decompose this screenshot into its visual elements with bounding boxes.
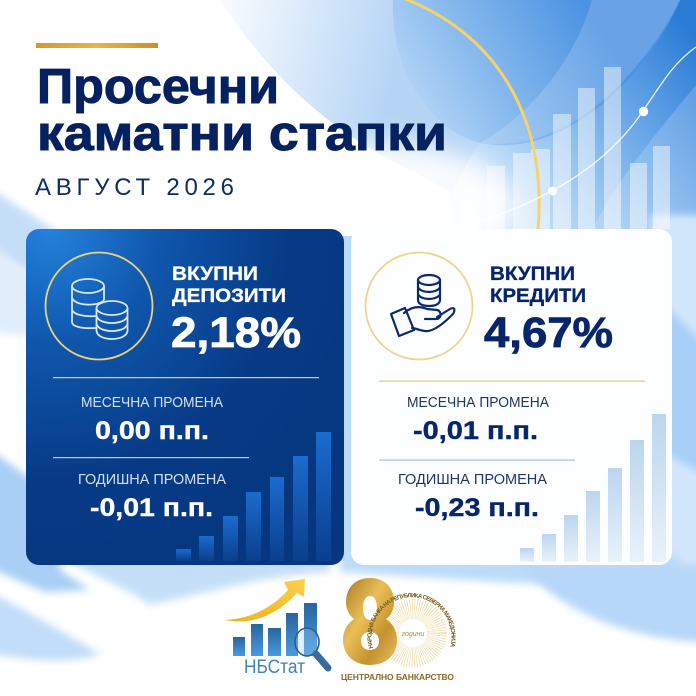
- title: [37, 60, 447, 161]
- logo: 80 years: ЦЕНТРАЛНО БАНКАРСТВО: [341, 672, 454, 682]
- label: total loans: КРЕДИТИ: [490, 286, 586, 307]
- label: annual change: ГОДИШНА ПРОМЕНА: [78, 472, 226, 488]
- title: Просечни: [37, 60, 279, 114]
- chart: deposits bars: [176, 432, 331, 561]
- label: total deposits: ДЕПОЗИТИ: [172, 286, 286, 307]
- label: monthly change: МЕСЕЧНА ПРОМЕНА: [81, 395, 223, 411]
- logo: 80 years: НАРОДНА БАНКА НА РЕПУБЛИКА СЕВЕРНА МАКЕДОНИЈА: [367, 593, 456, 649]
- label: total loans: ВКУПНИ: [490, 264, 575, 285]
- logo: NBStat: [225, 579, 328, 678]
- value: monthly change: 0,00 п.п.: [95, 417, 209, 445]
- value: annual change: -0,23 п.п.: [415, 494, 539, 522]
- logo: NBStat: НБСтат: [244, 657, 305, 678]
- trend line with dots: [465, 47, 696, 228]
- panel: loans: [351, 229, 672, 565]
- logo: 80 years: години: [402, 631, 424, 638]
- label: annual change: ГОДИШНА ПРОМЕНА: [398, 472, 547, 488]
- label: total deposits: [172, 264, 286, 307]
- icon: hand with coins: [366, 252, 472, 360]
- logo: 80 years: [341, 578, 456, 682]
- icon: coins: [46, 252, 152, 360]
- chart: loans bars: [520, 414, 666, 562]
- label: total loans: [490, 264, 586, 307]
- value: deposits rate: 2,18%: [171, 309, 301, 357]
- label: monthly change: МЕСЕЧНА ПРОМЕНА: [407, 395, 549, 411]
- value: annual change: -0,01 п.п.: [90, 494, 213, 522]
- panel: deposits: [26, 229, 344, 565]
- accent bar: [36, 43, 158, 48]
- background bar chart: [409, 67, 670, 229]
- gold arc: [400, 0, 539, 230]
- value: loans rate: 4,67%: [484, 309, 613, 357]
- subtitle: АВГУСТ 2026: [35, 174, 234, 201]
- value: monthly change: -0,01 п.п.: [413, 417, 538, 445]
- label: total deposits: ВКУПНИ: [172, 264, 258, 285]
- title: каматни стапки: [37, 107, 447, 161]
